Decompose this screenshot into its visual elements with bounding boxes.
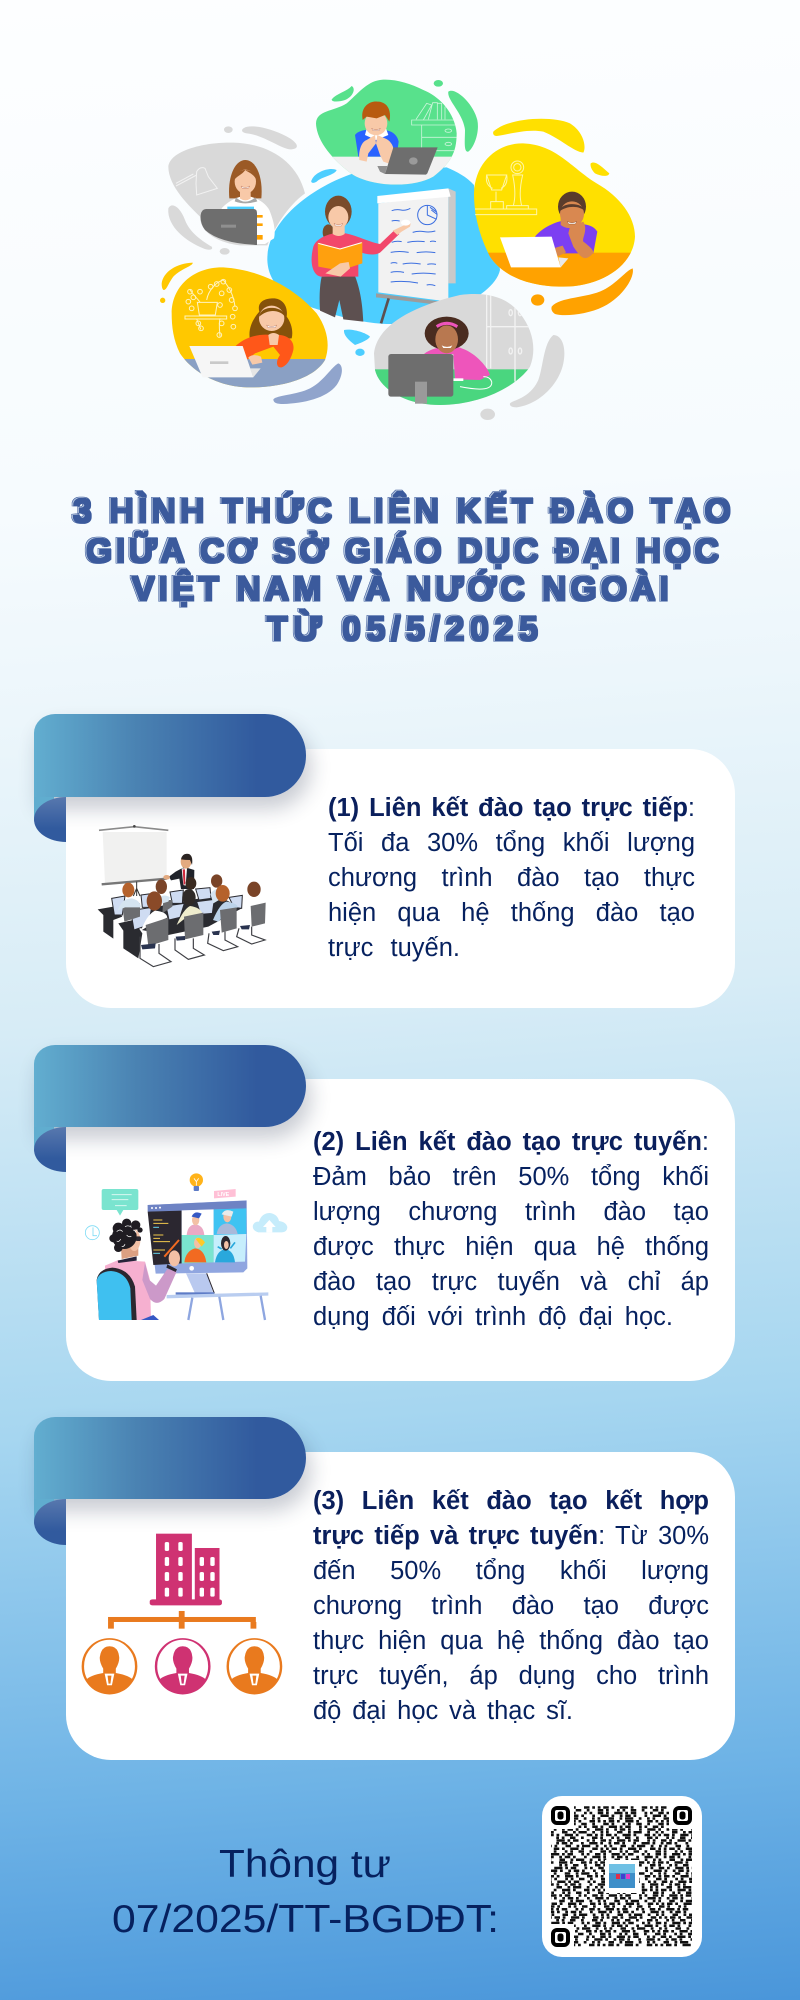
QR centre logo — [605, 1860, 639, 1893]
avatar centre — [156, 1639, 210, 1693]
blob: gray, girl with monitor — [370, 293, 537, 408]
footer: circular reference: Thông tư — [219, 1843, 391, 1886]
text: blended training: thực hiện qua hệ thống đào tạo — [313, 1626, 709, 1654]
text: blended training: đến 50% tổng khối lượng — [313, 1556, 709, 1584]
text: blended training: trực tuyến, áp dụng cho trình — [313, 1662, 709, 1690]
text: online training: dụng đối với trình độ đại học. — [313, 1302, 673, 1330]
panel: blended training — [30, 1417, 735, 1760]
title: GIỮA CƠ SỞ GIÁO DỤC ĐẠI HỌC — [85, 532, 718, 570]
ribbon edge — [34, 797, 54, 821]
ribbon edge — [34, 1499, 54, 1523]
QR code — [542, 1796, 702, 1957]
text: blended training: trực tiếp và trực tuyến: Từ 30% — [313, 1522, 709, 1550]
ribbon banner — [34, 1417, 306, 1499]
title — [71, 490, 730, 648]
icon: classroom with presenter — [98, 825, 267, 968]
text: online training: được thực hiện qua hệ thống — [313, 1232, 709, 1260]
title: 3 HÌNH THỨC LIÊN KẾT ĐÀO TẠO — [72, 492, 730, 530]
decorative blobs — [160, 80, 633, 420]
footer: circular reference — [112, 1843, 499, 1941]
blob: gray, woman with laptop — [168, 143, 305, 245]
text: direct training: chương trình đào tạo thực — [328, 864, 695, 892]
text: online training: (2) Liên kết đào tạo trực tuyến: — [313, 1128, 709, 1156]
panel: online training — [29, 1045, 735, 1381]
ribbon banner — [34, 714, 306, 797]
text: blended training: độ đại học và thạc sĩ. — [313, 1696, 573, 1724]
title: VIỆT NAM VÀ NƯỚC NGOÀI — [131, 570, 668, 608]
text: online training: Đảm bảo trên 50% tổng khối — [313, 1162, 709, 1190]
avatar left — [83, 1639, 136, 1693]
blob: gold, girl in orange — [170, 267, 333, 391]
icon: video conference at monitor: LIVE — [217, 1192, 230, 1198]
panel: direct training — [29, 714, 735, 1008]
ribbon edge — [34, 1127, 54, 1151]
card background — [66, 749, 735, 1008]
ribbon fold — [34, 1499, 66, 1545]
title: TỪ 05/5/2025 — [266, 610, 537, 648]
ribbon banner — [34, 1045, 306, 1127]
text: online training: đào tạo trực tuyến và chỉ áp — [313, 1268, 709, 1296]
footer: circular reference: 07/2025/TT-BGDĐT: — [112, 1898, 499, 1941]
text: direct training: Tối đa 30% tổng khối lượng — [328, 828, 695, 856]
blob: green, boy with laptop — [316, 80, 457, 185]
central blue blob with teacher — [267, 167, 500, 324]
QR finder patterns — [549, 1804, 694, 1949]
icon: video conference at monitor — [85, 1173, 288, 1320]
text: direct training — [328, 794, 695, 962]
illustration: online learning participants — [160, 80, 635, 420]
text: blended training — [313, 1486, 709, 1724]
text: online training — [313, 1128, 709, 1330]
text: blended training: (3) Liên kết đào tạo kết hợp — [313, 1486, 709, 1514]
avatar right — [228, 1639, 281, 1693]
ribbon fold — [34, 797, 66, 842]
text: direct training: (1) Liên kết đào tạo trực tiếp: — [328, 794, 695, 822]
card background — [66, 1452, 735, 1760]
text: direct training: trực tuyến. — [328, 934, 460, 962]
text: blended training: chương trình đào tạo được — [313, 1592, 709, 1620]
icon: organisation chart with building — [82, 1534, 282, 1694]
text: online training: lượng chương trình đào tạo — [313, 1198, 709, 1226]
blob: yellow, boy in purple — [473, 143, 640, 289]
text: direct training: hiện qua hệ thống đào tạo — [328, 898, 695, 926]
ribbon fold — [34, 1127, 66, 1172]
card background — [66, 1079, 735, 1381]
